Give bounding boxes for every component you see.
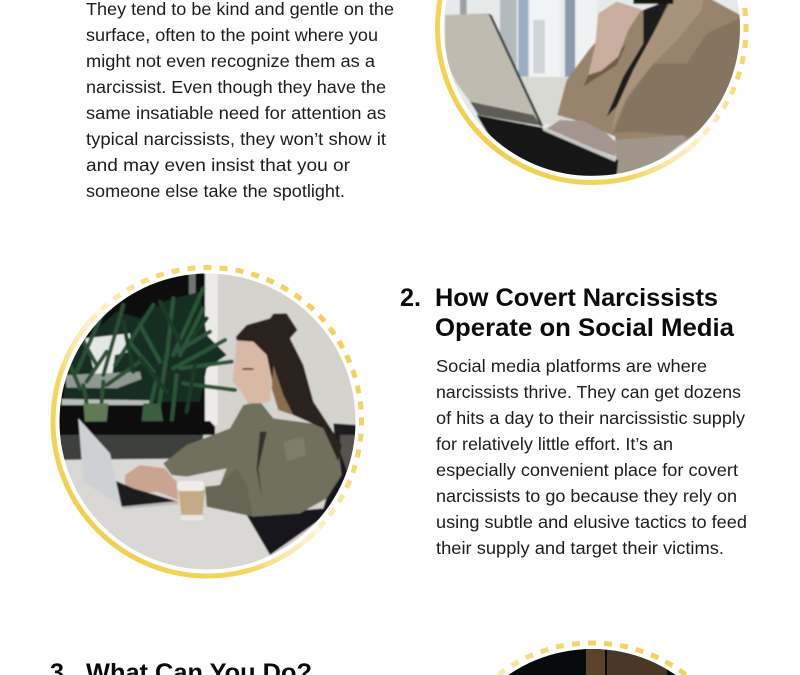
hand [547,120,617,157]
photo: woman at laptop in dotted ring [50,265,364,578]
text block: section 2 body: for relatively little effort. It’s an [436,434,673,454]
text block: section 1 body: might not even recognize them as a [86,51,375,71]
text block: section 2 body: Social media platforms are where [436,356,707,376]
text block: section 1 body: surface, often to the point where you [86,25,378,45]
laptop [78,418,122,507]
face [233,340,272,403]
woman body [247,452,348,555]
hair [236,313,342,462]
laptop base [477,115,618,177]
text block: section 2 body: of hits a day to their narcissistic supply [436,408,745,428]
text block: section 2 body: narcissists to go because they rely on [436,486,737,506]
text block: section 1 body: same insatiable need for attention as [86,103,386,123]
heading: section 2: How Covert Narcissists [435,284,718,312]
photo: section 3 in dotted ring [496,640,688,675]
text block: section 2 body [436,356,747,558]
ledge [53,421,215,435]
text block: section 2 body: narcissists thrive. They can get dozens [436,382,741,402]
text block: section 2 body: their supply and target their victims. [436,538,724,558]
laptop screen [445,13,541,126]
plant leaves [70,288,235,422]
text block: section 1 body: and may even insist that you or [86,155,350,175]
text block: section 1 body [86,0,394,201]
plant foliage mass [63,292,227,402]
text block: section 1 body: typical narcissists, they won’t show it [86,129,386,149]
table [70,458,136,460]
heading: section 2: 2. [400,284,421,312]
text block: section 1 body: narcissist. Even though they have the [86,77,386,97]
chair [332,422,356,443]
heading: section 2: Operate on Social Media [435,314,735,342]
text block: section 1 body: someone else take the spotlight. [86,181,345,201]
photo: man with laptop in dotted ring [435,0,748,185]
hands [125,465,178,500]
bright window behind plant [85,333,130,378]
text block: section 2 body: especially convenient place for covert [436,460,738,480]
heading: section 2 [400,284,735,342]
coffee cup [178,490,205,517]
text block: section 2 body: using subtle and elusive tactics to feed [436,512,747,532]
coat [557,0,743,175]
